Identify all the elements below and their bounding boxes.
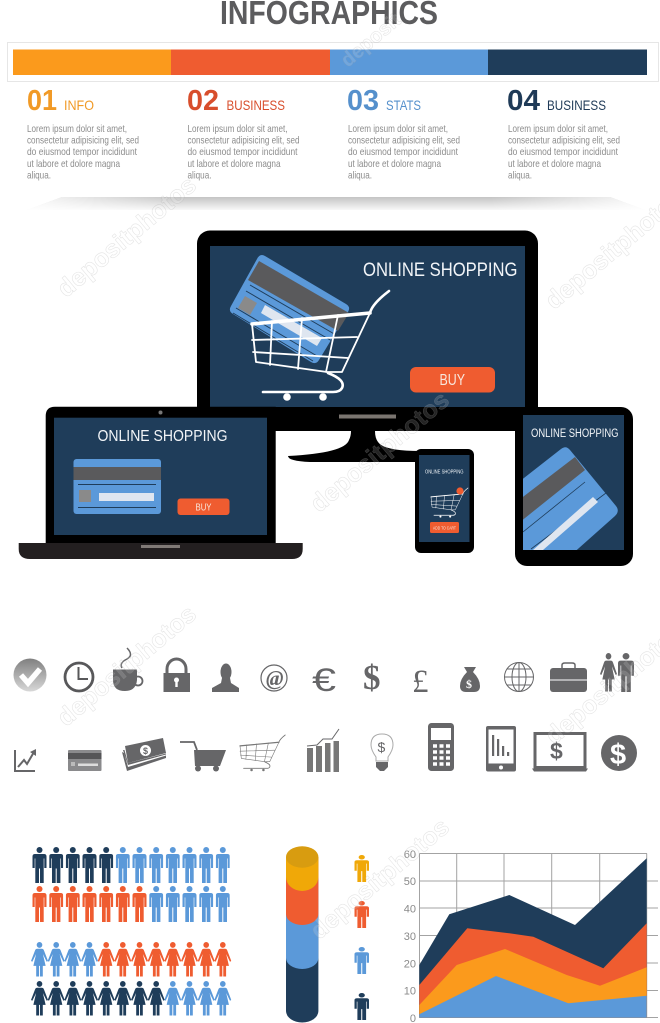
- column 04 business: Lorem ipsum dolor sit amet,: [508, 123, 608, 135]
- column 03 stats: STATS: [386, 97, 421, 113]
- y axis labels: 10: [404, 986, 416, 998]
- icon: clock: [65, 663, 93, 691]
- icon: briefcase: [550, 663, 587, 692]
- monitor credit card: [230, 255, 349, 363]
- column 02 business: ut labore et dolore magna: [188, 158, 281, 170]
- tablet: [515, 407, 633, 566]
- column 04 business: 04: [507, 85, 540, 117]
- icon: light bulb: $: [378, 739, 386, 755]
- chart grid: [420, 854, 658, 1018]
- column 04 business: consectetur adipisicing elit, sed: [508, 134, 620, 146]
- phone badge: [456, 487, 464, 495]
- column 04 business: aliqua.: [508, 170, 532, 182]
- column 01 info: consectetur adipisicing elit, sed: [27, 134, 139, 146]
- icon: calculator: [428, 723, 454, 771]
- y axis labels: [404, 849, 416, 1023]
- icon: woman: [600, 653, 617, 691]
- blue area: [419, 976, 647, 1018]
- column 01 info: [27, 85, 139, 182]
- column 04 business: ut labore et dolore magna: [508, 158, 601, 170]
- laptop credit card: [74, 459, 161, 514]
- red area: [419, 923, 647, 1018]
- y axis labels: 50: [404, 876, 416, 888]
- icon: globe: [504, 662, 534, 692]
- watermark: depositphotos: [52, 171, 202, 303]
- column 01 info: aliqua.: [27, 170, 51, 182]
- icon: pound: £: [412, 664, 428, 700]
- icon: banknotes: [122, 738, 166, 771]
- column 03 stats: aliqua.: [348, 170, 372, 182]
- column 01 info: do eiusmod tempor incididunt: [27, 146, 137, 158]
- people row 3: women blue and red: [31, 942, 231, 977]
- column 02 business: do eiusmod tempor incididunt: [188, 146, 298, 158]
- smartphone: [415, 449, 474, 553]
- watermark: depositphotos: [52, 600, 202, 732]
- laptop buy button: [178, 498, 230, 515]
- column 03 stats: 03: [347, 85, 379, 117]
- area chart: [404, 849, 658, 1023]
- phone add to cart button: ADD TO CART: [433, 526, 456, 530]
- icon: light bulb: [371, 734, 393, 771]
- tablet credit card: [523, 447, 618, 550]
- people row 1: men navy and blue: [32, 847, 230, 883]
- icon: padlock: [164, 659, 190, 692]
- panel shadow: [27, 197, 645, 210]
- column 03 stats: consectetur adipisicing elit, sed: [348, 134, 460, 146]
- icon: money bag: [460, 667, 480, 692]
- column 03 stats: ut labore et dolore magna: [348, 158, 441, 170]
- icon: dollar: $: [363, 658, 380, 697]
- column 03 stats: Lorem ipsum dolor sit amet,: [348, 123, 448, 135]
- laptop heading: ONLINE SHOPPING: [98, 428, 228, 445]
- icon: bar chart: [307, 729, 339, 772]
- watermark: depositphotos: [305, 813, 455, 945]
- monitor heading: ONLINE SHOPPING: [363, 260, 518, 281]
- phone cart: [431, 488, 468, 518]
- icon: growth chart: [15, 749, 36, 771]
- icon: card: [68, 750, 102, 771]
- icon: at sign: @: [266, 666, 283, 690]
- column 02 business: [187, 85, 300, 182]
- icon: tablet chart: [486, 726, 516, 772]
- column 03 stats: [347, 85, 460, 182]
- people row 4: women navy and blue: [31, 981, 231, 1016]
- icon: solid cart: [180, 742, 226, 772]
- icon: laptop dollar: [532, 734, 588, 772]
- column 04 business: [507, 85, 620, 182]
- watermark: depositphotos: [305, 386, 455, 518]
- tablet heading: ONLINE SHOPPING: [531, 428, 619, 440]
- column 01 info: INFO: [64, 97, 94, 113]
- icon: user: [212, 664, 239, 692]
- icon: dollar coin: $: [610, 739, 626, 771]
- navy area: [419, 858, 647, 1018]
- column 02 business: consectetur adipisicing elit, sed: [188, 134, 300, 146]
- monitor shopping cart: [252, 291, 389, 401]
- monitor buy button: BUY: [440, 372, 465, 389]
- column 02 business: BUSINESS: [226, 97, 285, 113]
- phone heading: ONLINE SHOPPING: [425, 470, 464, 476]
- column 03 stats: do eiusmod tempor incididunt: [348, 146, 458, 158]
- icon: banknotes: $: [143, 746, 148, 756]
- orange area: [419, 949, 647, 1018]
- y axis labels: 20: [404, 958, 416, 970]
- laptop buy button: BUY: [196, 502, 212, 514]
- icon: man: [618, 653, 634, 692]
- column 01 info: 01: [27, 85, 57, 117]
- colour bar panel: [8, 42, 658, 82]
- legend figures: [354, 855, 369, 1020]
- stacked cylinder: [286, 846, 318, 1023]
- people row 2: men red and blue: [32, 886, 230, 922]
- icon: euro: €: [312, 662, 336, 698]
- laptop: [19, 407, 303, 559]
- column 01 info: Lorem ipsum dolor sit amet,: [27, 123, 127, 135]
- monitor buy button: [410, 367, 495, 392]
- icon: check: [14, 658, 46, 692]
- column 04 business: BUSINESS: [547, 97, 606, 113]
- column 02 business: aliqua.: [188, 170, 212, 182]
- icon: at sign: [261, 665, 287, 691]
- icon row 2: [15, 723, 637, 772]
- icon: coffee cup: [113, 648, 142, 691]
- column 01 info: ut labore et dolore magna: [27, 158, 120, 170]
- icon: money bag: $: [466, 677, 472, 691]
- y axis labels: 40: [404, 904, 416, 916]
- y axis labels: 60: [404, 849, 416, 861]
- column 04 business: do eiusmod tempor incididunt: [508, 146, 618, 158]
- column 02 business: Lorem ipsum dolor sit amet,: [188, 123, 288, 135]
- icon row 1: [14, 648, 634, 700]
- watermark: deposit: [337, 9, 406, 72]
- column 02 business: 02: [187, 85, 219, 117]
- y axis labels: 30: [404, 931, 416, 943]
- icon: laptop dollar: $: [550, 738, 563, 764]
- desktop monitor: [197, 230, 538, 462]
- icon: outline cart: [240, 735, 285, 771]
- icon: dollar coin: [601, 735, 637, 771]
